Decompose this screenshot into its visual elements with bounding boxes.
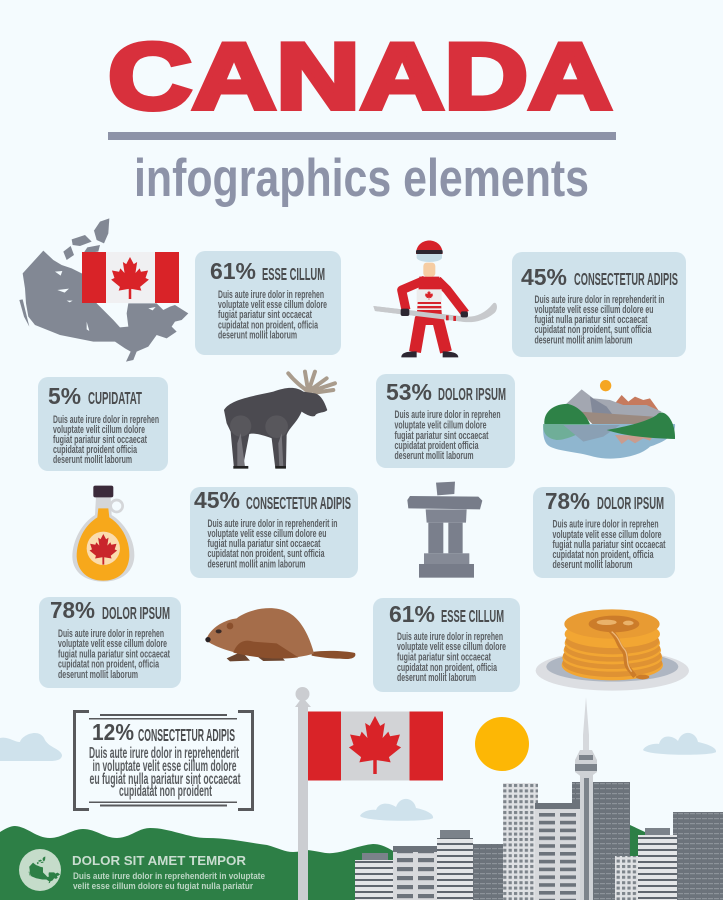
panel: 78% dolor ipsum left: deserunt mollit laborum <box>58 669 138 681</box>
panel: 5% cupidatat: fugiat pariatur sint occaecat <box>53 434 147 446</box>
panel: 61% esse cillum: Duis aute irure dolor in reprehen <box>218 289 324 301</box>
badge: Canada map circle <box>19 849 61 891</box>
panel: 45% consectetur adipis second <box>190 487 358 578</box>
frame: 12% consectetur adipis: CONSECTETUR ADIPIS <box>138 725 235 745</box>
panel: 45% consectetur adipis: 45% <box>521 264 567 290</box>
panel: 45% consectetur adipis second: cupidatat non proident, sunt officia <box>208 548 325 560</box>
panel: 61% esse cillum lower: 61% <box>389 601 435 627</box>
panel: 61% esse cillum lower: Duis aute irure dolor in reprehen <box>397 631 503 643</box>
building 8 <box>638 828 677 900</box>
map of Canada <box>19 218 188 362</box>
icon: maple syrup bottle <box>72 486 134 582</box>
icon: hockey player <box>373 240 497 357</box>
panel: 78% dolor ipsum right: deserunt mollit laborum <box>552 559 632 571</box>
panel: 61% esse cillum lower: deserunt mollit laborum <box>397 672 476 684</box>
panel: 5% cupidatat: voluptate velit cillum dolore <box>53 424 145 436</box>
city skyline <box>355 697 723 900</box>
illustration: Canada map with flag <box>19 218 188 362</box>
panel: 78% dolor ipsum left: fugiat nulla pariatur sint occaecat <box>58 648 170 660</box>
building 3 <box>437 830 473 900</box>
panel: 61% esse cillum: fugiat pariatur sint occaecat <box>218 309 312 321</box>
icon: beaver <box>205 608 355 661</box>
frame: 12% consectetur adipis: cupidatat non proident <box>119 783 212 800</box>
panel: 61% esse cillum lower: cupidatat non proident, officia <box>397 662 497 674</box>
panel: 45% consectetur adipis second: deserunt mollit anim laborum <box>208 558 306 570</box>
panel: 53% dolor ipsum <box>376 374 515 468</box>
green hills <box>0 825 645 900</box>
panel: 5% cupidatat <box>38 377 168 471</box>
panel: 53% dolor ipsum: cupidatat proident officia <box>394 440 479 452</box>
panel: 78% dolor ipsum left: cupidatat non proident, officia <box>58 658 159 670</box>
panel: 53% dolor ipsum: voluptate velit cillum dolore <box>394 420 486 432</box>
panel: 5% cupidatat: deserunt mollit laborum <box>53 454 132 466</box>
panel: 78% dolor ipsum right <box>533 487 675 578</box>
panel: 45% consectetur adipis second: voluptate velit esse cillum dolore eu <box>208 528 327 540</box>
panel: 5% cupidatat: 5% <box>48 383 81 409</box>
panel: 53% dolor ipsum: fugiat pariatur sint occaecat <box>394 430 489 442</box>
panel: 61% esse cillum: voluptate velit esse cillum dolore <box>218 299 327 311</box>
dark tower back <box>572 782 630 900</box>
icon: inukshuk <box>407 482 482 578</box>
building 1 <box>355 853 393 900</box>
frame: 12% consectetur adipis: Duis aute irure dolor in reprehenderit <box>89 745 239 762</box>
building 5 <box>503 783 538 900</box>
panel: 61% esse cillum <box>195 251 341 355</box>
icon: moose <box>224 372 335 469</box>
subtitle: infographics elements <box>134 149 589 208</box>
panel: 45% consectetur adipis second: CONSECTETUR ADIPIS <box>246 493 351 513</box>
panel: 61% esse cillum lower: ESSE CILLUM <box>441 606 504 626</box>
frame: 12% consectetur adipis: 12% <box>92 719 134 745</box>
panel: 78% dolor ipsum left: Duis aute irure dolor in reprehen <box>58 628 164 640</box>
footer text block: Duis aute irure dolor in reprehenderit in voluptate <box>73 871 265 881</box>
cloud right <box>643 733 716 755</box>
footer text block <box>72 853 265 891</box>
panel: 45% consectetur adipis: deserunt mollit anim laborum <box>534 334 632 346</box>
panel: 78% dolor ipsum right: 78% <box>545 488 590 514</box>
panel: 5% cupidatat: CUPIDATAT <box>88 388 142 408</box>
icon: mountain lake <box>543 380 675 459</box>
panel: 61% esse cillum lower: voluptate velit esse cillum dolore <box>397 641 506 653</box>
panel: 45% consectetur adipis: fugiat nulla pariatur sint occaecat <box>534 314 648 326</box>
panel: 78% dolor ipsum left: voluptate velit esse cillum dolore <box>58 638 167 650</box>
panel: 45% consectetur adipis second: 45% <box>194 487 240 513</box>
cloud middle <box>360 799 433 821</box>
panel: 45% consectetur adipis <box>512 252 686 357</box>
panel: 78% dolor ipsum left <box>39 597 181 688</box>
frame: 12% consectetur adipis: eu fugiat nulla pariatur sint occaecat <box>90 771 240 788</box>
panel: 61% esse cillum: deserunt mollit laborum <box>218 330 297 342</box>
panel: 78% dolor ipsum left: 78% <box>50 597 95 623</box>
large Canadian flag <box>308 712 443 780</box>
panel: 53% dolor ipsum: Duis aute irure dolor in reprehen <box>394 409 501 421</box>
panel: 53% dolor ipsum: DOLOR IPSUM <box>438 384 506 404</box>
building 9 <box>673 812 723 900</box>
panel: 53% dolor ipsum: deserunt mollit laborum <box>394 450 474 462</box>
panel: 61% esse cillum: cupidatat non proident, officia <box>218 320 318 332</box>
flag pole <box>295 687 311 900</box>
panel: 61% esse cillum lower: fugiat pariatur sint occaecat <box>397 652 491 664</box>
panel: 53% dolor ipsum: 53% <box>386 379 432 405</box>
footer text block: DOLOR SIT AMET TEMPOR <box>72 853 247 868</box>
panel: 78% dolor ipsum right: DOLOR IPSUM <box>597 493 664 513</box>
building 6 <box>535 803 580 900</box>
CN tower <box>575 697 597 900</box>
frame: 12% consectetur adipis: in voluptate velit esse cillum dolore <box>92 758 237 775</box>
frame: 12% consectetur adipis <box>74 712 252 810</box>
title divider <box>108 132 616 140</box>
panel: 61% esse cillum: 61% <box>210 258 256 284</box>
panel: 61% esse cillum: ESSE CILLUM <box>262 264 325 284</box>
panel: 61% esse cillum lower <box>373 598 520 692</box>
flag on map <box>82 252 179 303</box>
panel: 45% consectetur adipis: cupidatat non proident, sunt officia <box>534 324 652 336</box>
panel: 5% cupidatat: Duis aute irure dolor in reprehen <box>53 414 159 426</box>
building 4 <box>473 844 503 900</box>
panel: 5% cupidatat: cupidatat proident officia <box>53 444 137 456</box>
icon: pancakes <box>536 609 689 691</box>
panel: 45% consectetur adipis second: Duis aute irure dolor in reprehenderit in <box>208 518 338 530</box>
building 2 <box>393 846 439 900</box>
panel: 78% dolor ipsum left: DOLOR IPSUM <box>102 603 170 623</box>
building 7 <box>615 856 642 900</box>
panel: 78% dolor ipsum right: cupidatat non proident, officia <box>552 549 654 561</box>
footer text block: velit esse cillum dolore eu fugiat nulla pariatur <box>73 881 253 891</box>
sun <box>475 717 529 771</box>
cloud left <box>0 733 62 761</box>
title: CANADA: CANADA <box>108 24 612 129</box>
panel: 45% consectetur adipis second: fugiat nulla pariatur sint occaecat <box>208 538 321 550</box>
